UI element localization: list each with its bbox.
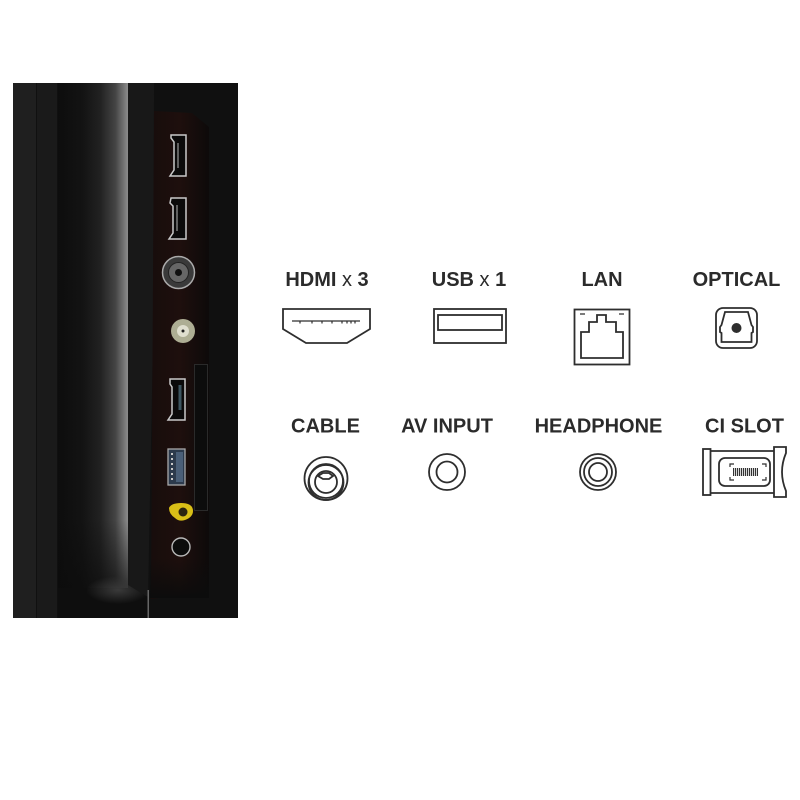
- port: HDMI 3: [168, 379, 185, 420]
- label: CABLE: CABLE: [291, 416, 360, 438]
- panel: TV side photo: [13, 83, 238, 618]
- label: LAN: LAN: [581, 269, 623, 291]
- label: HEADPHONE: HEADPHONE: [535, 416, 662, 438]
- icon: HDMI: [283, 309, 370, 343]
- icon: LAN: [574, 310, 630, 364]
- icon: CI SLOT: [703, 447, 786, 497]
- card slot: [194, 364, 208, 510]
- icon: USB: [434, 309, 506, 343]
- bezel strips: [13, 83, 238, 618]
- icon: OPTICAL: [716, 308, 757, 348]
- icon: AV INPUT: [429, 454, 465, 490]
- port: satellite connector: [171, 319, 195, 343]
- label: AV INPUT: AV INPUT: [401, 416, 493, 438]
- label: USB x 1: USB x 1: [432, 269, 506, 291]
- label: CI SLOT: CI SLOT: [705, 416, 784, 438]
- label: OPTICAL: OPTICAL: [693, 269, 780, 291]
- label: HDMI x 3: HDMI x 3: [285, 269, 369, 291]
- port: cable antenna: [162, 256, 194, 288]
- port: headphone: [172, 538, 190, 556]
- port panel: [151, 111, 209, 599]
- icon: HEADPHONE: [580, 454, 616, 490]
- port: yellow AV: [169, 503, 193, 521]
- icon: CABLE: [304, 457, 348, 500]
- port: HDMI 2: [169, 198, 186, 239]
- port: HDMI 1: [170, 135, 186, 176]
- port: USB: [168, 449, 185, 485]
